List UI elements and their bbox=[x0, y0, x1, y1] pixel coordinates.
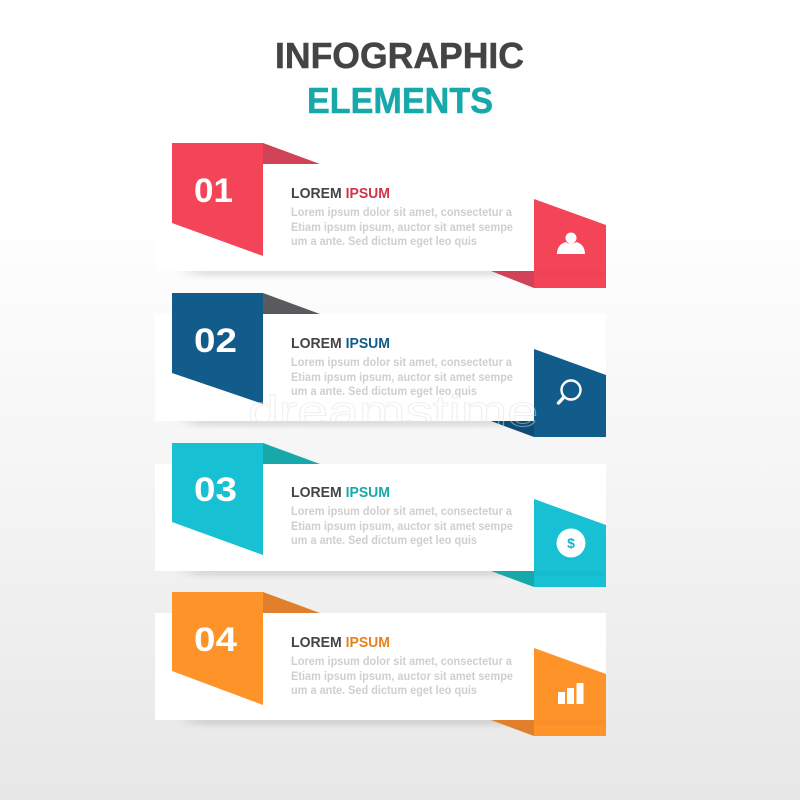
number tab 03 bbox=[172, 443, 320, 555]
text block 04: Lorem ipsum dolor sit amet, consectetur a bbox=[291, 656, 513, 668]
icon tab: magnifier bbox=[491, 349, 606, 437]
title bbox=[275, 35, 524, 121]
icon tab: dollar coin bbox=[491, 499, 606, 587]
text block 02 bbox=[291, 335, 513, 398]
text block 01: Lorem ipsum dolor sit amet, consectetur a bbox=[291, 207, 513, 219]
number tab 01: 01 bbox=[194, 172, 233, 210]
title: INFOGRAPHIC bbox=[275, 35, 524, 76]
text block 04: um a ante. Sed dictum eget leo quis bbox=[291, 685, 477, 697]
text block 01: LOREM IPSUM bbox=[291, 185, 390, 202]
number tab 02: 02 bbox=[194, 322, 237, 360]
text block 03 bbox=[291, 484, 513, 547]
number tab 04: 04 bbox=[194, 621, 237, 659]
text block 04: LOREM IPSUM bbox=[291, 634, 390, 651]
text block 01: Etiam ipsum ipsum, auctor sit amet sempe bbox=[291, 222, 513, 234]
number tab 03: 03 bbox=[194, 471, 237, 509]
panel: step 02 bbox=[155, 293, 606, 437]
text block 03: Etiam ipsum ipsum, auctor sit amet sempe bbox=[291, 521, 513, 533]
text block 04: Etiam ipsum ipsum, auctor sit amet sempe bbox=[291, 671, 513, 683]
panel: step 03 bbox=[155, 443, 606, 587]
panel: step 04 bbox=[155, 592, 606, 736]
text block 01: um a ante. Sed dictum eget leo quis bbox=[291, 236, 477, 248]
text block 01 bbox=[291, 185, 513, 248]
title: ELEMENTS bbox=[307, 80, 493, 121]
text block 02: Etiam ipsum ipsum, auctor sit amet sempe bbox=[291, 372, 513, 384]
panel: step 01 bbox=[155, 143, 606, 288]
icon tab: bar chart bbox=[491, 648, 606, 736]
watermark: dreamstime bbox=[248, 387, 538, 436]
text block 02: um a ante. Sed dictum eget leo quis bbox=[291, 386, 477, 398]
text block 04 bbox=[291, 634, 513, 697]
text block 02: Lorem ipsum dolor sit amet, consectetur a bbox=[291, 357, 513, 369]
text block 03: Lorem ipsum dolor sit amet, consectetur a bbox=[291, 506, 513, 518]
number tab 02 bbox=[172, 293, 320, 404]
text block 03: LOREM IPSUM bbox=[291, 484, 390, 501]
text block 03: um a ante. Sed dictum eget leo quis bbox=[291, 535, 477, 547]
icon tab: dollar coin: $ bbox=[567, 535, 575, 551]
text block 02: LOREM IPSUM bbox=[291, 335, 390, 352]
icon tab: person bbox=[491, 199, 606, 288]
number tab 01 bbox=[172, 143, 320, 256]
number tab 04 bbox=[172, 592, 320, 705]
